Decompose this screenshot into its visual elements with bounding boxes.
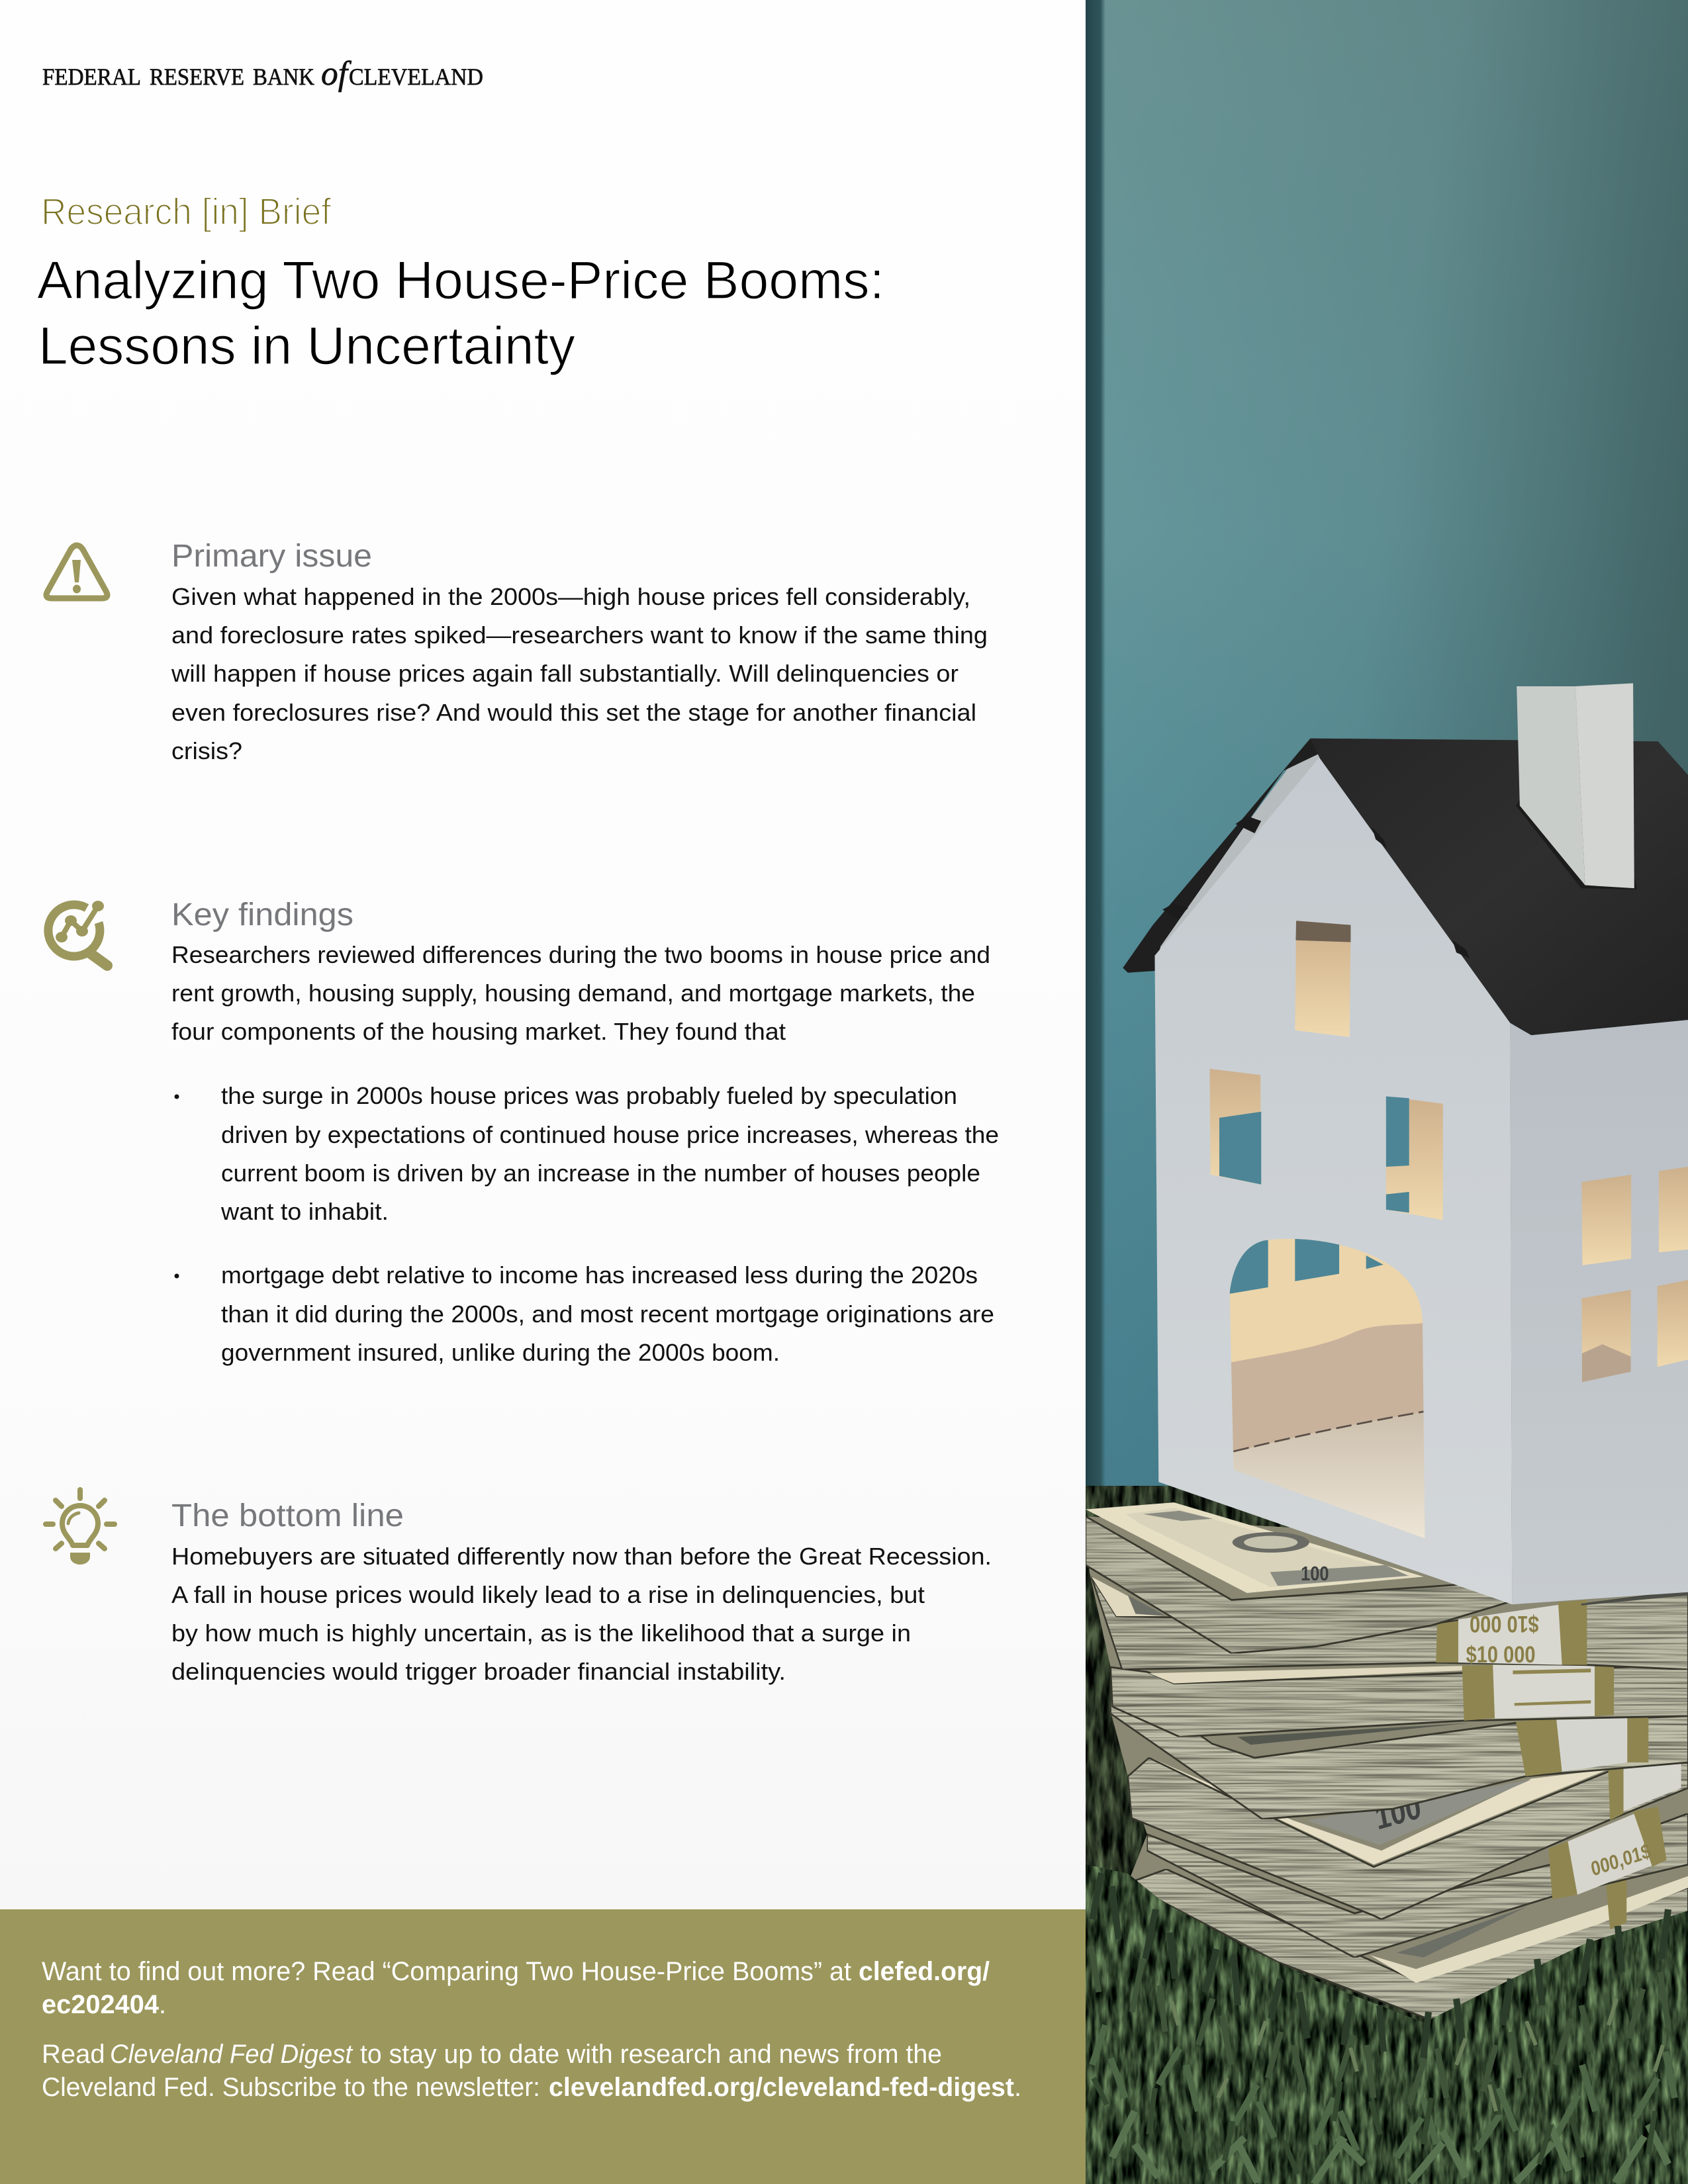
stacks of hundred-dollar bills xyxy=(1086,1502,1688,2020)
arched door opening xyxy=(1228,1231,1428,1543)
footer text: subscribe to digest: to stay up to date with research and news from the xyxy=(360,2040,942,2069)
bullet: mortgage debt: than it did during the 2000s, and most recent mortgage originations are xyxy=(221,1300,994,1328)
body text: key findings intro: Researchers reviewed differences during the two booms in house price and xyxy=(171,941,990,968)
icon: warning triangle xyxy=(46,545,107,598)
body text: the bottom line: by how much is highly uncertain, as is the likelihood that a surge in xyxy=(171,1619,911,1647)
heading: key findings: Key findings xyxy=(171,897,353,933)
bullet: mortgage debt xyxy=(175,1261,994,1366)
icon: magnifier with chart line xyxy=(48,901,107,966)
front wall xyxy=(1154,756,1512,1604)
footer text: read the paper xyxy=(42,1957,990,2019)
front windows xyxy=(1209,921,1443,1220)
grass behind the money xyxy=(1086,1486,1688,2184)
stacks of hundred-dollar bills: 100 xyxy=(1301,1563,1329,1586)
footer text: subscribe to digest: Cleveland Fed. Subscribe to the newsletter: xyxy=(42,2073,540,2102)
stacks of hundred-dollar bills: $10 000 xyxy=(1470,1611,1539,1637)
bullet: surge in house prices: current boom is driven by an increase in the number of houses people xyxy=(221,1160,980,1187)
side windows xyxy=(1581,1167,1688,1382)
title: Lessons in Uncertainty xyxy=(38,316,575,376)
logo: Federal Reserve Bank of Cleveland xyxy=(42,55,483,93)
body text: primary issue: even foreclosures rise? And would this set the stage for another financial xyxy=(171,699,976,726)
section: key findings xyxy=(48,897,999,1366)
bullet: mortgage debt: mortgage debt relative to income has increased less during the 2020s xyxy=(221,1261,978,1289)
footer text: read the paper: Want to find out more? Read “Comparing Two House-Price Booms” at xyxy=(42,1957,851,1986)
body text: the bottom line: A fall in house prices would likely lead to a rise in delinquencies, but xyxy=(171,1581,925,1608)
chimney xyxy=(1516,683,1637,889)
title xyxy=(37,251,884,376)
stacks of hundred-dollar bills: 000,01$ xyxy=(1589,1840,1653,1881)
bullet: surge in house prices: the surge in 2000s house prices was probably fueled by speculation xyxy=(221,1082,957,1109)
section: primary issue xyxy=(46,539,988,764)
body text: key findings intro: four components of the housing market. They found that xyxy=(171,1018,786,1045)
section: the bottom line xyxy=(46,1490,992,1685)
logo: Federal Reserve Bank of Cleveland: FEDERAL xyxy=(42,64,141,90)
body text: the bottom line: delinquencies would trigger broader financial instability. xyxy=(171,1658,786,1685)
footer text: read the paper: ec202404 xyxy=(42,1990,160,2019)
footer text: subscribe to digest xyxy=(42,2040,1021,2102)
bullet: surge in house prices: driven by expectations of continued house price increases, whereas the xyxy=(221,1121,999,1148)
footer text: subscribe to digest: Cleveland Fed Digest xyxy=(110,2040,353,2069)
bullet: surge in house prices: want to inhabit. xyxy=(220,1198,389,1225)
body text: primary issue xyxy=(171,583,988,764)
stacks of hundred-dollar bills: $10 000 xyxy=(1466,1642,1535,1668)
body text: the bottom line: Homebuyers are situated differently now than before the Great Recession. xyxy=(171,1543,992,1570)
footer text: read the paper: clefed.org/ xyxy=(859,1957,990,1986)
roof xyxy=(1311,739,1688,1035)
body text: primary issue: Given what happened in the 2000s—high house prices fell considerably, xyxy=(171,583,970,610)
footer text: read the paper: . xyxy=(159,1990,166,2019)
body text: the bottom line xyxy=(171,1543,992,1685)
panel: photo of house on stacks of money xyxy=(1086,0,1688,2184)
footer text: subscribe to digest: clevelandfed.org/cleveland-fed-digest xyxy=(549,2073,1014,2102)
side wall xyxy=(1510,1020,1688,1604)
bullet: surge in house prices xyxy=(175,1082,999,1225)
heading: primary issue: Primary issue xyxy=(171,539,372,574)
bullet: mortgage debt: government insured, unlike during the 2000s boom. xyxy=(221,1339,780,1366)
logo: Federal Reserve Bank of Cleveland: CLEVELAND xyxy=(349,64,483,90)
footer text: subscribe to digest: . xyxy=(1014,2073,1021,2102)
heading: the bottom line: The bottom line xyxy=(171,1498,404,1533)
roof underside and eave xyxy=(1123,739,1324,973)
house model xyxy=(1123,683,1688,1604)
eyebrow: Research [in] Brief: Research [in] Brief xyxy=(41,191,331,233)
body text: primary issue: will happen if house prices again fall substantially. Will delinquencies or xyxy=(171,660,959,687)
teal wall background xyxy=(1086,0,1688,1522)
body text: key findings intro xyxy=(171,941,990,1045)
logo: Federal Reserve Bank of Cleveland: of xyxy=(321,55,352,93)
panel: footer call to action xyxy=(0,1909,1086,2184)
logo: Federal Reserve Bank of Cleveland: RESERVE xyxy=(150,64,244,90)
body text: primary issue: and foreclosure rates spiked—researchers want to know if the same thing xyxy=(171,621,988,649)
stacks of hundred-dollar bills: 100 xyxy=(1372,1788,1424,1837)
body text: key findings intro: rent growth, housing supply, housing demand, and mortgage markets, the xyxy=(171,979,975,1007)
panel: left white content column xyxy=(0,0,1086,1909)
body text: primary issue: crisis? xyxy=(171,737,242,764)
icon: light bulb xyxy=(46,1490,115,1565)
foreground grass xyxy=(1086,1864,1688,2184)
footer text: subscribe to digest: Read xyxy=(42,2040,105,2069)
roof clips xyxy=(1162,816,1470,959)
logo: Federal Reserve Bank of Cleveland: BANK xyxy=(253,64,314,90)
grass blades xyxy=(1091,1873,1675,2184)
title: Analyzing Two House-Price Booms: xyxy=(37,251,884,310)
